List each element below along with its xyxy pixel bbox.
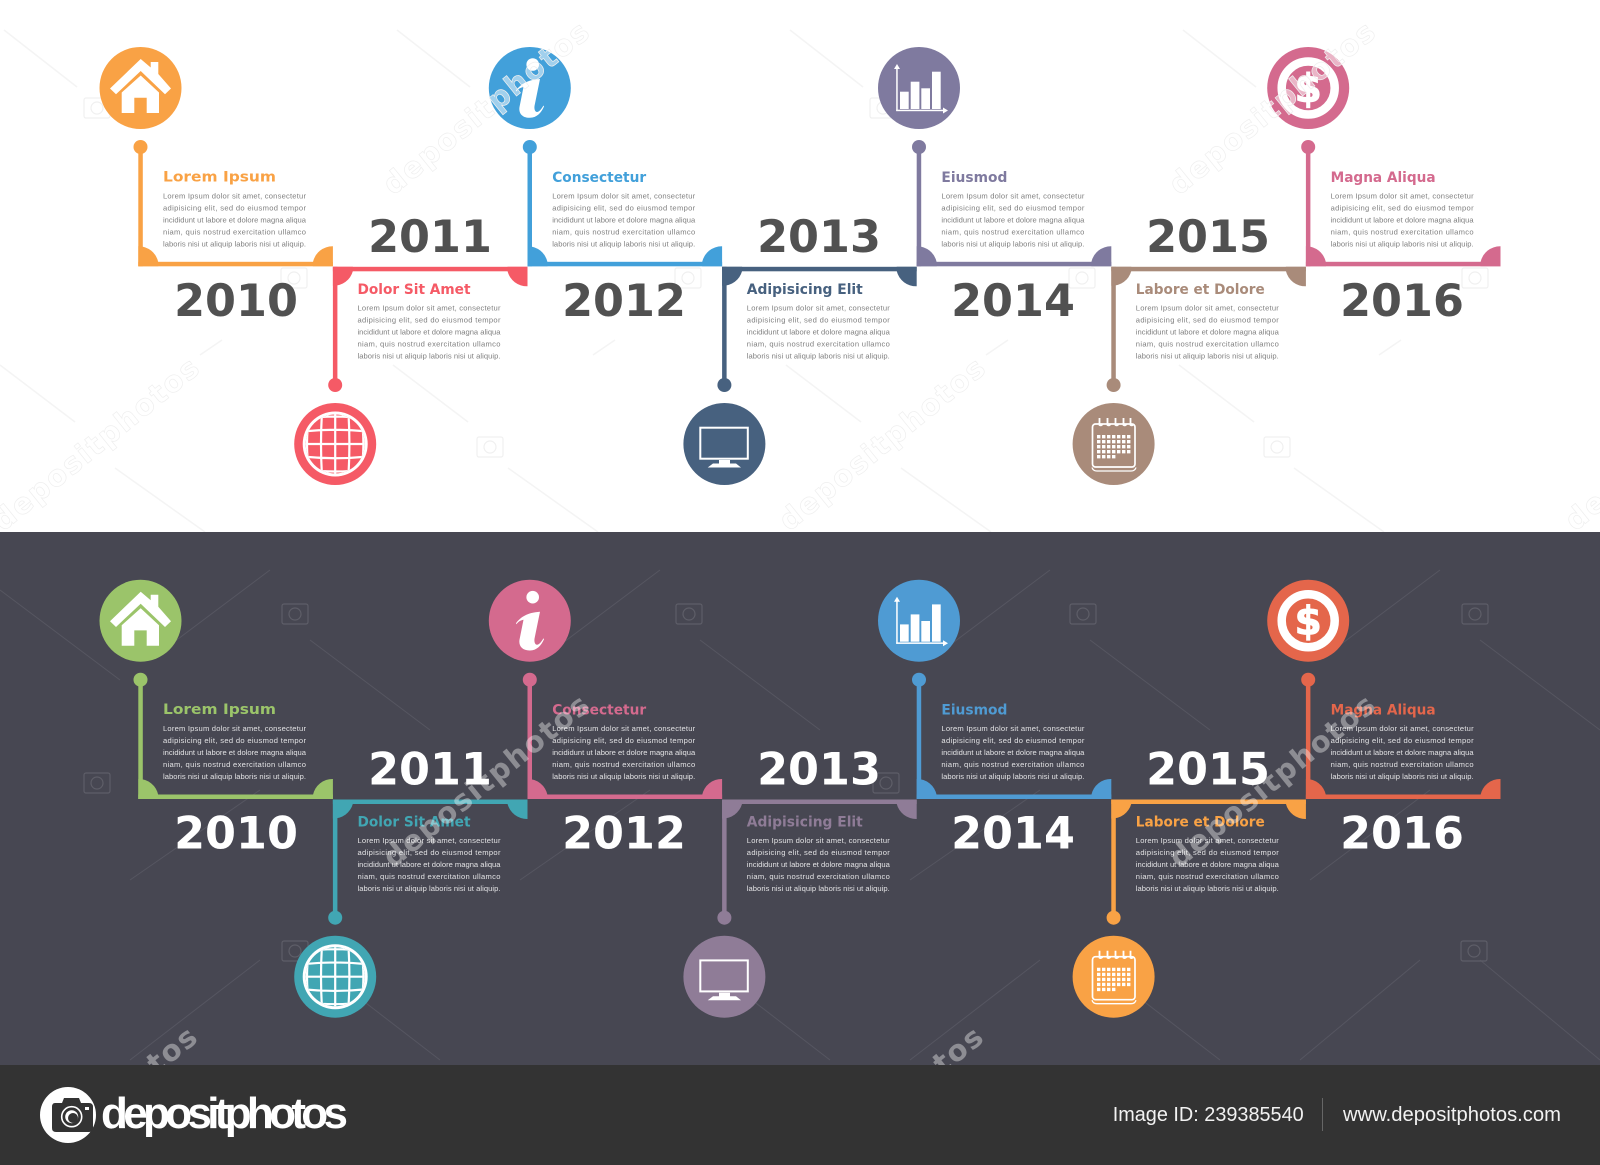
connector 2011 <box>328 267 528 392</box>
year: 2015 <box>1146 745 1270 796</box>
watermark: light panel: depositphotos <box>376 15 596 201</box>
text block <box>1136 304 1280 360</box>
icon: info <box>489 580 571 662</box>
connector 2010 <box>134 140 333 266</box>
text block: niam, quis nostrud exercitation ullamco <box>163 760 306 769</box>
text block: Lorem Ipsum dolor sit amet, consectetur <box>747 304 890 312</box>
text block: incididunt ut labore et dolore magna aliqua <box>747 860 891 869</box>
watermark: dark panel: depositphotos <box>376 688 596 874</box>
text block <box>941 192 1085 248</box>
icon: house <box>100 47 182 129</box>
text block: niam, quis nostrud exercitation ullamco <box>1136 340 1279 348</box>
text block: Lorem Ipsum dolor sit amet, consectetur <box>552 724 696 733</box>
text block: adipisicing elit, sed do eiusmod tempor <box>1136 848 1279 857</box>
image id: Image ID: 239385540 <box>1113 1104 1304 1126</box>
panel: dark background <box>0 532 1600 1065</box>
step 2014 <box>878 580 1111 860</box>
text block: Lorem Ipsum dolor sit amet, consectetur <box>163 724 306 733</box>
text block: adipisicing elit, sed do eiusmod tempor <box>1331 736 1474 745</box>
text block: Lorem Ipsum dolor sit amet, consectetur <box>358 304 501 312</box>
text block: incididunt ut labore et dolore magna aliqua <box>1331 748 1474 757</box>
text block: incididunt ut labore et dolore magna aliqua <box>552 216 696 224</box>
connector 2015 <box>1107 267 1306 392</box>
text block: adipisicing elit, sed do eiusmod tempor <box>163 204 306 212</box>
watermark: light panel: depositphotos <box>772 351 992 537</box>
watermark: dark panel: depositphotos <box>1162 688 1382 874</box>
connector 2015 <box>1107 800 1306 925</box>
text block <box>552 192 696 248</box>
text block: Lorem Ipsum dolor sit amet, consectetur <box>552 192 696 200</box>
connector 2016 <box>1301 140 1500 266</box>
text block: incididunt ut labore et dolore magna aliqua <box>1331 216 1474 224</box>
text block: laboris nisi ut aliquip laboris nisi ut aliquip. <box>163 240 306 248</box>
step 2011 <box>294 745 528 1018</box>
text block: niam, quis nostrud exercitation ullamco <box>1331 228 1474 236</box>
title: Adipisicing Elit <box>747 815 863 831</box>
text block: niam, quis nostrud exercitation ullamco <box>747 872 890 881</box>
text block: adipisicing elit, sed do eiusmod tempor <box>552 204 696 212</box>
text block <box>1136 836 1280 893</box>
title: Eiusmod <box>941 703 1007 719</box>
text block <box>1331 724 1474 781</box>
icon: info <box>489 47 571 129</box>
text block: niam, quis nostrud exercitation ullamco <box>552 760 695 769</box>
icon: camera logo <box>40 1087 96 1143</box>
watermark: light panel: depositphotos <box>1162 15 1382 201</box>
step 2012 <box>489 580 722 860</box>
year: 2015 <box>1146 212 1270 263</box>
icon: house <box>100 580 182 662</box>
text block: Lorem Ipsum dolor sit amet, consectetur <box>1136 836 1279 845</box>
title: Dolor Sit Amet <box>358 815 471 831</box>
icon: monitor <box>683 403 765 485</box>
panel: light timeline <box>100 47 1500 485</box>
text block: laboris nisi ut aliquip laboris nisi ut aliquip. <box>552 772 695 781</box>
text block <box>1331 192 1474 248</box>
step 2015 <box>1073 212 1306 485</box>
text block <box>163 724 307 781</box>
step 2015 <box>1073 745 1306 1018</box>
text block <box>941 724 1085 781</box>
step 2010 <box>100 580 333 860</box>
year: 2012 <box>562 276 686 327</box>
text block: incididunt ut labore et dolore magna aliqua <box>358 328 501 336</box>
connector 2012 <box>523 140 722 266</box>
text block: niam, quis nostrud exercitation ullamco <box>747 340 890 348</box>
title: Dolor Sit Amet <box>358 282 471 298</box>
text block <box>747 304 891 360</box>
title: Magna Aliqua <box>1331 170 1436 186</box>
text block: adipisicing elit, sed do eiusmod tempor <box>552 736 696 745</box>
year: 2012 <box>562 809 686 860</box>
panel: footer bar <box>0 1065 1600 1165</box>
connector 2013 <box>717 267 917 392</box>
text block: niam, quis nostrud exercitation ullamco <box>941 760 1084 769</box>
text block: laboris nisi ut aliquip laboris nisi ut aliquip. <box>358 884 500 893</box>
text block: adipisicing elit, sed do eiusmod tempor <box>747 316 890 324</box>
text block: laboris nisi ut aliquip laboris nisi ut aliquip. <box>1331 240 1474 248</box>
step 2016 <box>1267 580 1500 860</box>
text block: laboris nisi ut aliquip laboris nisi ut aliquip. <box>941 240 1084 248</box>
icon: bar chart <box>878 47 960 129</box>
text block: incididunt ut labore et dolore magna aliqua <box>941 216 1085 224</box>
icon: calendar <box>1073 403 1155 485</box>
year: 2013 <box>757 212 881 263</box>
text block: adipisicing elit, sed do eiusmod tempor <box>941 204 1085 212</box>
title: Magna Aliqua <box>1331 703 1436 719</box>
text block: incididunt ut labore et dolore magna aliqua <box>163 748 307 757</box>
title: Consectetur <box>552 170 647 186</box>
text block: Lorem Ipsum dolor sit amet, consectetur <box>1331 724 1474 733</box>
decorative watermark strokes <box>0 570 1600 1060</box>
text block: adipisicing elit, sed do eiusmod tempor <box>358 848 501 857</box>
title: Consectetur <box>552 703 647 719</box>
year: 2014 <box>951 809 1075 860</box>
text block: laboris nisi ut aliquip laboris nisi ut aliquip. <box>747 352 890 360</box>
text block: adipisicing elit, sed do eiusmod tempor <box>1331 204 1474 212</box>
step 2010 <box>100 47 333 327</box>
text block <box>163 192 307 248</box>
text block: adipisicing elit, sed do eiusmod tempor <box>941 736 1085 745</box>
connector 2014 <box>912 673 1111 799</box>
logo wordmark: depositphotos <box>101 1089 348 1138</box>
text block: incididunt ut labore et dolore magna aliqua <box>358 860 501 869</box>
step 2013 <box>683 745 917 1018</box>
icon: bar chart <box>878 580 960 662</box>
icon: dollar coin <box>1267 580 1349 662</box>
text block: incididunt ut labore et dolore magna aliqua <box>1136 328 1280 336</box>
text block: niam, quis nostrud exercitation ullamco <box>163 228 306 236</box>
footer logo <box>40 1087 348 1143</box>
text block: Lorem Ipsum dolor sit amet, consectetur <box>1331 192 1474 200</box>
year: 2013 <box>757 745 881 796</box>
text block: laboris nisi ut aliquip laboris nisi ut aliquip. <box>1136 884 1279 893</box>
icon: globe <box>294 403 376 485</box>
text block: niam, quis nostrud exercitation ullamco <box>1136 872 1279 881</box>
year: 2011 <box>368 212 492 263</box>
text block: adipisicing elit, sed do eiusmod tempor <box>163 736 306 745</box>
text block: laboris nisi ut aliquip laboris nisi ut aliquip. <box>358 352 500 360</box>
connector 2011 <box>328 800 528 925</box>
title: Eiusmod <box>941 170 1007 186</box>
text block: incididunt ut labore et dolore magna aliqua <box>552 748 696 757</box>
year: 2014 <box>951 276 1075 327</box>
text block: adipisicing elit, sed do eiusmod tempor <box>358 316 501 324</box>
text block: incididunt ut labore et dolore magna aliqua <box>163 216 307 224</box>
text block: laboris nisi ut aliquip laboris nisi ut aliquip. <box>747 884 890 893</box>
text block: laboris nisi ut aliquip laboris nisi ut aliquip. <box>1331 772 1474 781</box>
text block: niam, quis nostrud exercitation ullamco <box>941 228 1084 236</box>
connector 2014 <box>912 140 1111 266</box>
year: 2011 <box>368 745 492 796</box>
text block <box>552 724 696 781</box>
text block: adipisicing elit, sed do eiusmod tempor <box>1136 316 1279 324</box>
icon: calendar <box>1073 936 1155 1018</box>
text block <box>358 304 501 360</box>
watermark: dark panel <box>146 698 1374 1065</box>
step 2016 <box>1267 47 1500 327</box>
text block: laboris nisi ut aliquip laboris nisi ut aliquip. <box>163 772 306 781</box>
text block <box>358 836 501 893</box>
year: 2016 <box>1340 809 1464 860</box>
step 2011 <box>294 212 528 485</box>
text block: niam, quis nostrud exercitation ullamco <box>552 228 695 236</box>
text block: niam, quis nostrud exercitation ullamco <box>358 872 500 881</box>
panel: dark timeline <box>100 580 1500 1018</box>
icon: monitor <box>683 936 765 1018</box>
step 2014 <box>878 47 1111 327</box>
year: 2010 <box>174 276 298 327</box>
text block: Lorem Ipsum dolor sit amet, consectetur <box>747 836 890 845</box>
icon: dollar coin <box>1267 47 1349 129</box>
connector 2016 <box>1301 673 1500 799</box>
text block: laboris nisi ut aliquip laboris nisi ut aliquip. <box>1136 352 1279 360</box>
text block: Lorem Ipsum dolor sit amet, consectetur <box>1136 304 1279 312</box>
website url: www.depositphotos.com <box>1342 1104 1561 1126</box>
icon: globe <box>294 936 376 1018</box>
watermark: light panel <box>0 15 1600 537</box>
connector 2013 <box>717 800 917 925</box>
text block: niam, quis nostrud exercitation ullamco <box>358 340 500 348</box>
text block: laboris nisi ut aliquip laboris nisi ut aliquip. <box>941 772 1084 781</box>
text block: Lorem Ipsum dolor sit amet, consectetur <box>163 192 306 200</box>
text block: incididunt ut labore et dolore magna aliqua <box>1136 860 1280 869</box>
text block: Lorem Ipsum dolor sit amet, consectetur <box>941 192 1085 200</box>
title: Lorem Ipsum <box>163 170 276 186</box>
text block: Lorem Ipsum dolor sit amet, consectetur <box>358 836 501 845</box>
year: 2016 <box>1340 276 1464 327</box>
text block: laboris nisi ut aliquip laboris nisi ut aliquip. <box>552 240 695 248</box>
text block: Lorem Ipsum dolor sit amet, consectetur <box>941 724 1085 733</box>
text block: niam, quis nostrud exercitation ullamco <box>1331 760 1474 769</box>
text block: incididunt ut labore et dolore magna aliqua <box>747 328 891 336</box>
icon: dollar coin: $ <box>1295 67 1322 112</box>
connector 2012 <box>523 673 722 799</box>
title: Labore et Dolore <box>1136 815 1265 831</box>
title: Labore et Dolore <box>1136 282 1265 298</box>
step 2013 <box>683 212 917 485</box>
text block <box>747 836 891 893</box>
icon: dollar coin: $ <box>1295 600 1322 645</box>
connector 2010 <box>134 673 333 799</box>
year: 2010 <box>174 809 298 860</box>
step 2012 <box>489 47 722 327</box>
text block: incididunt ut labore et dolore magna aliqua <box>941 748 1085 757</box>
title: Adipisicing Elit <box>747 282 863 298</box>
text block: adipisicing elit, sed do eiusmod tempor <box>747 848 890 857</box>
title: Lorem Ipsum <box>163 702 276 718</box>
